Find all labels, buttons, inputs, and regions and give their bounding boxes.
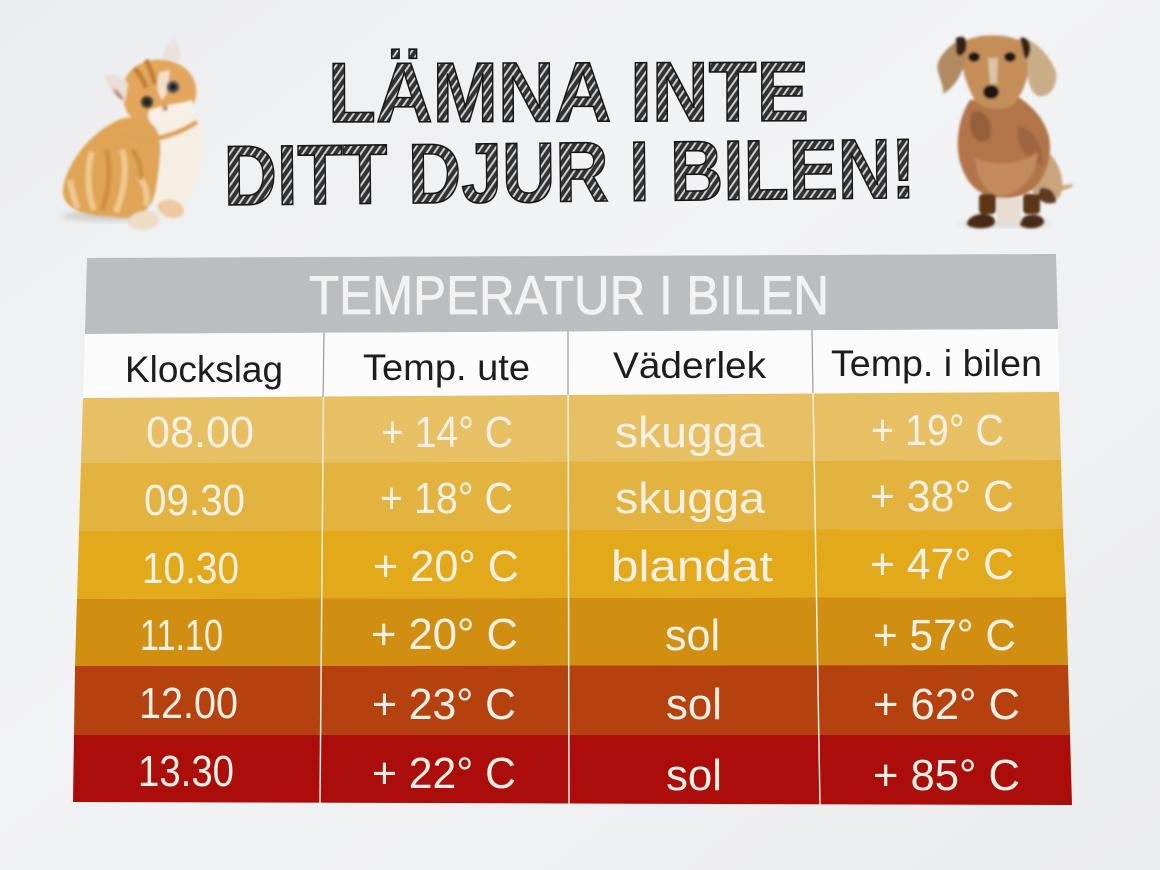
row 08.00: + 14° C — [381, 408, 513, 457]
title — [223, 45, 916, 224]
row 12.00: + 23° C — [372, 680, 516, 729]
row 09.30: + 38° C — [870, 472, 1014, 521]
column header row — [83, 329, 1059, 398]
row 13.30 — [73, 735, 1072, 805]
row 10.30: + 47° C — [870, 540, 1014, 589]
table banner — [85, 254, 1058, 334]
row 08.00: 08.00 — [146, 408, 254, 457]
row 11.10 — [75, 597, 1068, 666]
title line 2: DITT DJUR I BILEN! — [223, 122, 916, 224]
row 11.10: 11.10 — [140, 611, 223, 660]
row 09.30: skugga — [615, 474, 766, 523]
column header row: Temp. i bilen — [831, 343, 1042, 384]
row 12.00 — [74, 665, 1070, 735]
row 10.30 — [77, 529, 1066, 599]
row 09.30 — [79, 460, 1063, 531]
row 11.10: + 57° C — [873, 611, 1016, 660]
row 13.30: + 85° C — [873, 751, 1020, 800]
table: temperatur i bilen — [73, 254, 1072, 805]
row 12.00: 12.00 — [139, 679, 238, 728]
column header row: Klockslag — [125, 349, 283, 390]
row 10.30: + 20° C — [373, 542, 519, 591]
row 11.10: + 20° C — [371, 610, 518, 659]
row 11.10: sol — [665, 611, 720, 660]
row 09.30: + 18° C — [380, 474, 513, 523]
row 13.30: sol — [666, 751, 722, 800]
column header row: Temp. ute — [363, 347, 530, 388]
row 10.30: blandat — [611, 542, 773, 591]
row 13.30: 13.30 — [138, 747, 234, 796]
icon: kitten — [62, 38, 204, 230]
row 08.00 — [81, 392, 1061, 463]
row 12.00: sol — [666, 680, 722, 729]
table banner: TEMPERATUR I BILEN — [309, 264, 829, 326]
row 08.00: + 19° C — [871, 406, 1004, 455]
column header row: Väderlek — [613, 345, 767, 386]
row 09.30: 09.30 — [144, 476, 245, 525]
row 12.00: + 62° C — [873, 680, 1020, 729]
row 10.30: 10.30 — [142, 544, 239, 593]
row 08.00: skugga — [615, 408, 765, 457]
title line 1: LÄMNA INTE — [328, 45, 809, 141]
row 13.30: + 22° C — [372, 749, 516, 798]
icon: dachshund — [937, 35, 1073, 228]
